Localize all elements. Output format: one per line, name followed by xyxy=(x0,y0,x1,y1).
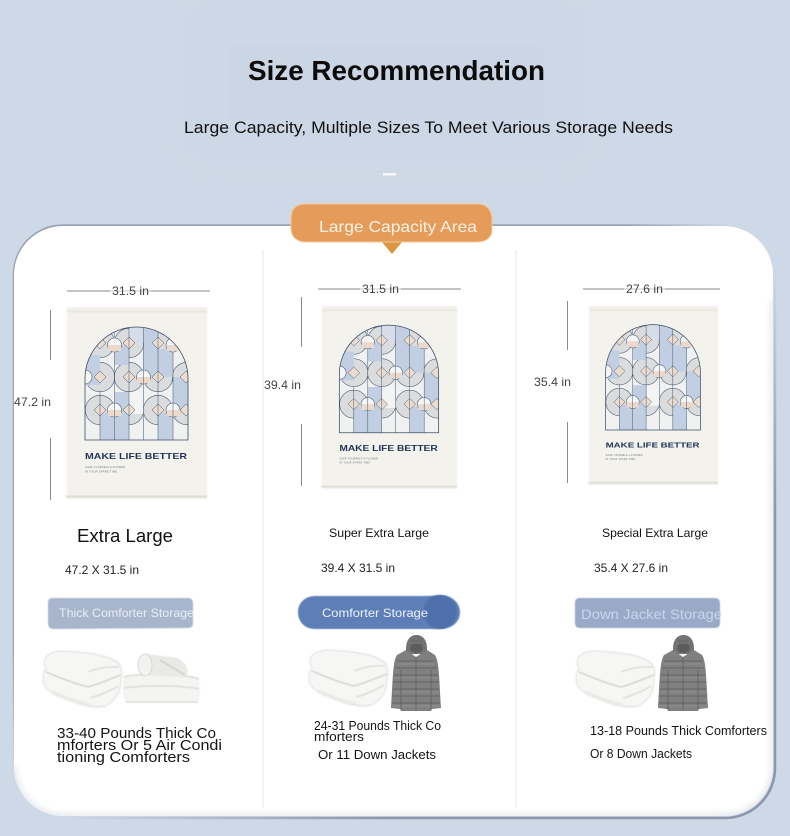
vacuum bag illustration: IN YOUR SPARE TIME xyxy=(606,458,635,461)
callout: large capacity area xyxy=(291,204,492,254)
icon: down jacket xyxy=(391,635,441,711)
width dimension xyxy=(67,284,210,298)
vacuum bag illustration: SAVE YOURSELF A FLOWER xyxy=(606,454,643,457)
vacuum bag illustration xyxy=(66,307,207,499)
column: extra large xyxy=(14,284,222,766)
capacity text: 13-18 Pounds Thick Comforters xyxy=(590,724,767,738)
capacity text: Or 11 Down Jackets xyxy=(318,748,436,762)
height dimension: 39.4 in xyxy=(264,378,301,392)
icon: folded comforter stack xyxy=(123,654,200,702)
width dimension: 27.6 in xyxy=(626,282,663,296)
tag: Thick Comforter Storage xyxy=(59,606,194,620)
tag: Comforter Storage xyxy=(322,606,428,620)
icon: comforter xyxy=(576,651,655,707)
tag xyxy=(48,598,194,629)
size name: Special Extra Large xyxy=(602,526,708,540)
capacity text xyxy=(57,725,222,766)
capacity text xyxy=(590,724,767,761)
width dimension xyxy=(583,282,720,296)
vacuum bag illustration xyxy=(321,306,457,489)
vacuum bag illustration xyxy=(588,306,718,485)
capacity text: tioning Comforters xyxy=(57,749,190,766)
capacity text: mforters xyxy=(314,730,364,744)
panel: size comparison card xyxy=(14,226,775,818)
vacuum bag illustration: MAKE LIFE BETTER xyxy=(85,451,187,461)
callout: large capacity area: Large Capacity Area xyxy=(319,219,477,236)
icon: comforter xyxy=(43,651,122,707)
title: Size Recommendation xyxy=(248,55,545,86)
size name: Extra Large xyxy=(77,526,173,546)
vacuum bag illustration: SAVE YOURSELF A FLOWER xyxy=(339,457,378,460)
capacity text: Or 8 Down Jackets xyxy=(590,747,692,761)
icon: comforter xyxy=(309,650,388,706)
height dimension: 47.2 in xyxy=(14,395,51,409)
dimensions: 39.4 X 31.5 in xyxy=(321,561,395,575)
vacuum bag illustration: IN YOUR SPARE TIME xyxy=(339,462,371,465)
column: super extra large xyxy=(264,282,461,762)
capacity text: 24-31 Pounds Thick Co xyxy=(314,719,441,733)
vacuum bag illustration: MAKE LIFE BETTER xyxy=(606,441,700,450)
width dimension: 31.5 in xyxy=(362,282,399,296)
icon: down jacket xyxy=(658,635,708,711)
vacuum bag illustration: IN YOUR SPARE TIME xyxy=(85,470,117,474)
width dimension: 31.5 in xyxy=(112,284,149,298)
tag xyxy=(575,598,722,628)
capacity text xyxy=(314,719,441,762)
size name: Super Extra Large xyxy=(329,526,429,540)
subtitle: Large Capacity, Multiple Sizes To Meet Various Storage Needs xyxy=(184,118,673,137)
vacuum bag illustration: MAKE LIFE BETTER xyxy=(339,444,438,453)
dimensions: 47.2 X 31.5 in xyxy=(65,563,139,577)
vacuum bag illustration: SAVE YOURSELF A FLOWER xyxy=(85,465,125,469)
height dimension: 35.4 in xyxy=(534,375,571,389)
capacity text: mforters Or 5 Air Condi xyxy=(57,737,222,754)
tag: Down Jacket Storage xyxy=(581,606,722,622)
tag xyxy=(298,595,460,629)
width dimension xyxy=(318,282,461,296)
dimensions: 35.4 X 27.6 in xyxy=(594,561,668,575)
column: special extra large xyxy=(534,282,767,761)
capacity text: 33-40 Pounds Thick Co xyxy=(57,725,216,742)
